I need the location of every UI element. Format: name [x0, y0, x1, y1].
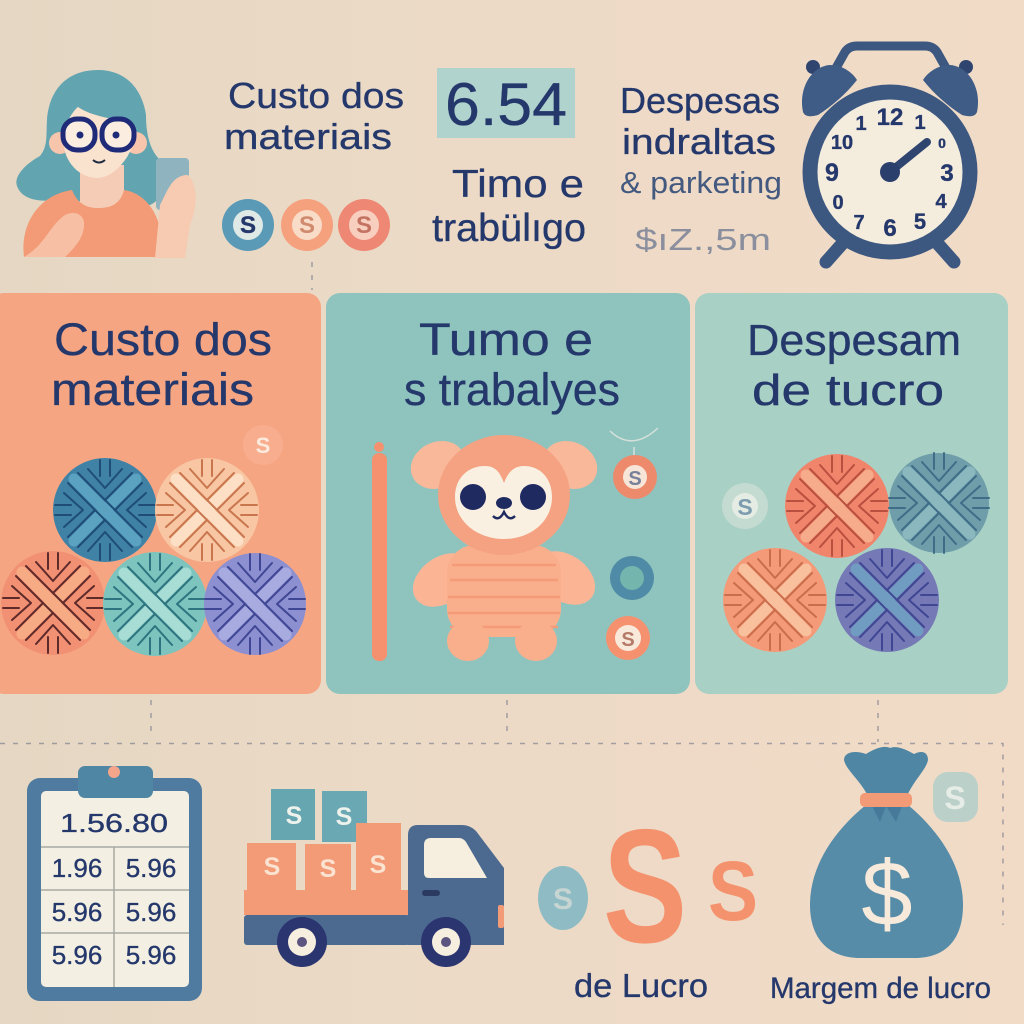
coin row: S — [356, 212, 372, 239]
glasses — [63, 119, 134, 150]
panel heading: de tucro — [752, 366, 944, 415]
coin: S — [737, 494, 753, 520]
icon: money bag — [810, 747, 978, 958]
coin pendant: S — [628, 468, 642, 490]
heading: custo dos materiais (top): Custo dos — [228, 75, 404, 116]
dollar symbols — [538, 796, 758, 977]
yarn balls — [723, 453, 989, 652]
clipboard: 1.56.80 — [60, 808, 168, 838]
panel heading: Custo dos — [54, 314, 272, 365]
icon: alarm clock: 5 — [914, 209, 926, 234]
icon: amigurumi toy — [403, 432, 605, 661]
clipboard: 5.96 — [126, 853, 176, 883]
panel: custo dos materiais — [0, 293, 321, 694]
crochet hook — [372, 442, 387, 661]
panel heading — [404, 314, 620, 415]
icon: money bag: $ — [861, 843, 913, 945]
clipboard: 1.96 — [52, 853, 102, 883]
icon: alarm clock: 9 — [825, 159, 839, 187]
coin pendant — [610, 428, 658, 499]
label: margem de lucro: Margem de lucro — [770, 972, 991, 1005]
clipboard: 5.96 — [126, 897, 176, 927]
ears — [49, 132, 147, 154]
icon: delivery truck: S — [370, 851, 386, 879]
phone — [156, 158, 189, 210]
icon: money bag: S — [944, 780, 966, 816]
icon: alarm clock: 0 — [832, 192, 844, 214]
icon: alarm clock — [802, 46, 978, 262]
icon: alarm clock: 1 — [855, 113, 867, 135]
heading: despesas indiretas — [620, 80, 780, 162]
clipboard: 5.96 — [126, 940, 176, 970]
coin orange: S — [621, 629, 635, 651]
icon: alarm clock: 7 — [853, 212, 865, 234]
dollar symbols: S — [553, 883, 573, 916]
heading: despesas indiretas: indraltas — [622, 121, 776, 162]
panel heading: materiais — [51, 364, 254, 415]
guide lines — [0, 262, 1003, 925]
face — [64, 107, 134, 178]
panel heading — [51, 314, 272, 415]
icon: alarm clock: 10 — [831, 132, 853, 154]
icon: alarm clock: 3 — [940, 160, 954, 187]
text: blurred amount: $ıZ.,5m — [635, 222, 771, 257]
panel heading — [747, 316, 961, 415]
dollar symbols: S — [708, 844, 758, 938]
icon: alarm clock: 6 — [883, 215, 897, 242]
coin — [722, 483, 768, 529]
icon: delivery truck: S — [264, 853, 280, 881]
coin: S — [256, 433, 270, 458]
heading: timo e trabalho: trabülıgo — [432, 207, 586, 250]
smile — [93, 160, 105, 162]
clipboard — [27, 766, 202, 1001]
icon: delivery truck — [244, 789, 504, 967]
panel heading: s trabalyes — [404, 364, 620, 415]
icon: alarm clock: 0 — [938, 135, 946, 151]
panel heading: Despesam — [747, 316, 961, 365]
icon: delivery truck: S — [286, 802, 302, 830]
icon: delivery truck: S — [320, 855, 336, 883]
neck — [80, 165, 124, 211]
coin orange — [606, 616, 650, 660]
heading: custo dos materiais (top) — [224, 75, 404, 157]
coin row: S — [240, 212, 256, 239]
clipboard: 5.96 — [52, 940, 102, 970]
heading: timo e trabalho — [432, 163, 586, 250]
icon: delivery truck: S — [336, 803, 352, 831]
dollar symbols: S — [603, 796, 687, 977]
hair — [16, 70, 164, 205]
coin row: S — [299, 212, 315, 239]
panel: person illustration — [16, 70, 196, 258]
heading: timo e trabalho: Timo e — [452, 163, 584, 206]
text: parketing: & parketing — [620, 165, 782, 200]
label: de lucro: de Lucro — [574, 967, 708, 1004]
number box: 6.54 — [445, 71, 567, 138]
icon: alarm clock: 1 — [914, 112, 926, 134]
panel: despesas de lucro — [695, 293, 1008, 694]
clipboard: 5.96 — [52, 897, 102, 927]
icon: alarm clock: 4 — [935, 191, 947, 213]
panel heading: Tumo e — [419, 314, 593, 365]
coin teal — [610, 556, 654, 600]
panel: tempo e trabalho — [326, 293, 690, 694]
left hand — [24, 213, 84, 257]
yarn balls — [1, 458, 306, 656]
heading: custo dos materiais (top): materiais — [224, 116, 392, 157]
icon: alarm clock: 12 — [877, 104, 903, 131]
coin — [243, 425, 283, 465]
eyes — [76, 132, 120, 138]
heading: despesas indiretas: Despesas — [620, 80, 780, 121]
body — [23, 190, 162, 257]
coin row — [222, 199, 390, 251]
right hand — [155, 175, 196, 258]
